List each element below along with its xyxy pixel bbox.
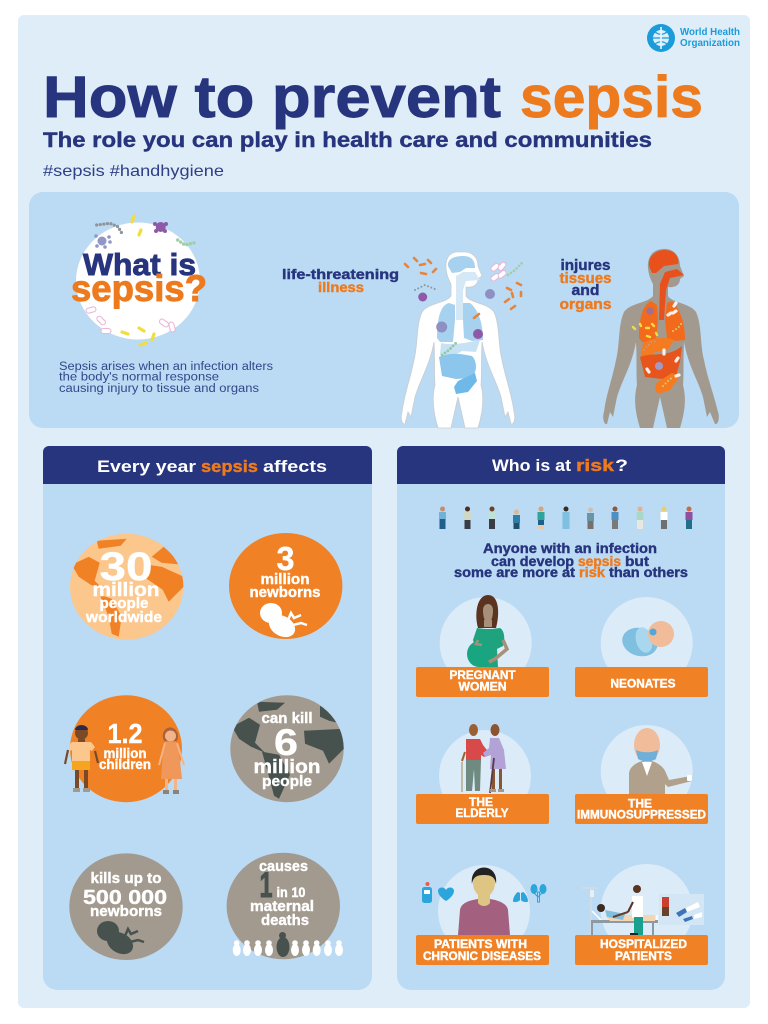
text: sepsis description: Sepsis arises when an infection alters [59, 361, 273, 373]
stat: 3 million newborns: 3 [276, 540, 294, 577]
risk: patients with chronic diseases [416, 865, 549, 965]
label: ELDERLY [456, 808, 509, 820]
label: WOMEN [458, 682, 506, 694]
stat: 3 million newborns: newborns [250, 584, 320, 601]
panel header [43, 446, 372, 484]
stat: causes 1 in 10 maternal deaths: deaths [261, 912, 309, 929]
title: How to prevent [43, 65, 501, 130]
stat: can kill 6 million people [230, 695, 344, 802]
stat: 1.2 million children [65, 695, 184, 802]
stat: causes 1 in 10 maternal deaths: 1 [260, 866, 272, 905]
icon: glucometer [422, 882, 432, 903]
stat: causes 1 in 10 maternal deaths: causes [259, 858, 308, 875]
icon: injured grey body with orange organs [603, 249, 719, 428]
label [416, 667, 549, 697]
stat: 30 million people worldwide: 30 [100, 545, 152, 589]
icon: WHO emblem [647, 24, 675, 52]
icon: row of people [439, 506, 692, 529]
stat: can kill 6 million people: people [262, 773, 312, 790]
label: HOSPITALIZED [600, 939, 687, 951]
panel header: ? [615, 456, 628, 475]
text: anyone with an infection: risk [579, 565, 606, 580]
heading: what is sepsis: sepsis? [71, 268, 207, 309]
microbes on organs [633, 303, 681, 386]
panel: every year sepsis affects [43, 446, 372, 990]
text: anyone with an infection [454, 541, 688, 580]
stat: kills up to 500 000 newborns: newborns [90, 903, 162, 920]
organs: orange [639, 250, 685, 394]
label [416, 935, 549, 965]
stat: kills up to 500 000 newborns: kills up to [90, 870, 162, 887]
stat: causes 1 in 10 maternal deaths: maternal [250, 898, 314, 915]
risk: the elderly [416, 724, 549, 824]
logo text: World Health [680, 26, 740, 38]
label: PREGNANT [450, 670, 516, 682]
label: injures tissues and organs: tissues [560, 271, 612, 287]
label: THE [469, 797, 493, 809]
logo text: Organization [680, 37, 740, 49]
risk: hospitalized patients [575, 864, 708, 965]
icon: patient [458, 868, 510, 935]
subtitle: The role you can play in health care and communities [43, 129, 652, 152]
icon: pregnant woman [467, 595, 507, 667]
microbes around body [405, 258, 522, 355]
label: injures tissues and organs: and [572, 283, 600, 299]
stat: can kill 6 million people: can kill [262, 710, 312, 727]
title: sepsis [520, 65, 703, 130]
panel header: sepsis [201, 457, 258, 476]
icon: hospital bed scene [582, 885, 704, 935]
label: injures tissues and organs [560, 258, 612, 313]
label: life-threatening illness: life-threatening [282, 267, 399, 282]
text: sepsis description: causing injury to tissue and organs [59, 383, 259, 395]
stat: 30 million people worldwide: worldwide [85, 610, 162, 626]
icon: white circle with microbes [76, 216, 200, 345]
icon: heart [438, 887, 454, 901]
hashtags: #sepsis #handhygiene [43, 163, 224, 180]
icon: lungs [513, 887, 528, 902]
label: CHRONIC DISEASES [423, 951, 541, 963]
panel: what is sepsis [29, 192, 739, 428]
label [575, 935, 708, 965]
heading: what is sepsis [71, 247, 207, 309]
text: anyone with an infection: can develop [491, 554, 574, 569]
risk: pregnant women [416, 595, 549, 697]
logo: World Health Organization [647, 24, 740, 52]
text: anyone with an infection: some are more at [454, 565, 576, 580]
icon: dark fetus [97, 921, 144, 959]
text: anyone with an infection: Anyone with an infection [483, 541, 657, 556]
label: IMMUNOSUPPRESSED [577, 810, 706, 822]
icon: row of pregnant women [233, 932, 343, 957]
stat: can kill 6 million people: 6 [274, 722, 298, 763]
label: injures tissues and organs: organs [560, 297, 612, 313]
icon: kidneys [530, 884, 546, 902]
label: PATIENTS [615, 951, 672, 963]
icon: swaddled baby [619, 621, 674, 660]
label [575, 794, 708, 824]
text: anyone with an infection: but [625, 554, 650, 569]
stat: can kill 6 million people: million [254, 757, 320, 778]
panel header [397, 446, 725, 484]
risk: the immunosuppressed [575, 725, 708, 824]
label [416, 794, 549, 824]
panel header: risk [576, 456, 615, 475]
organs: blue [437, 256, 483, 394]
stat: 30 million people worldwide: million [92, 580, 160, 601]
logo text [680, 26, 740, 49]
stat: causes 1 in 10 maternal deaths: in 10 [276, 884, 306, 900]
panel header: Who is at [492, 456, 571, 475]
stat: 3 million newborns [229, 533, 342, 642]
stat: 1.2 million children: million [104, 746, 146, 761]
stat: causes 1 in 10 maternal deaths [227, 853, 343, 959]
panel header: affects [263, 457, 327, 476]
stat: 30 million people worldwide [70, 534, 184, 640]
icon: white fetus [260, 603, 307, 642]
stat: kills up to 500 000 newborns [69, 853, 183, 960]
stat: kills up to 500 000 newborns: 500 000 [83, 887, 167, 909]
label: THE [628, 798, 652, 810]
panel header: Every year [97, 457, 196, 476]
stat: 1.2 million children: children [99, 757, 151, 772]
text: anyone with an infection: than others [609, 565, 688, 580]
label: PATIENTS WITH [434, 939, 527, 951]
icon: boy [65, 725, 98, 792]
icon: elderly couple [462, 724, 506, 793]
icon: masked man [629, 728, 692, 794]
stat: 1.2 million children: 1.2 [108, 718, 142, 749]
text: sepsis description [59, 361, 273, 395]
risk: neonates [575, 597, 708, 697]
icon: girl [159, 728, 184, 794]
label: injures tissues and organs: injures [560, 258, 610, 274]
stat: 3 million newborns: million [260, 571, 310, 588]
heading: what is sepsis: What is [83, 247, 196, 282]
text: sepsis description: the body's normal response [59, 372, 219, 384]
stat: 30 million people worldwide: people [100, 596, 148, 612]
text: anyone with an infection: sepsis [578, 554, 621, 569]
icon: healthy white body with microbes [401, 252, 522, 428]
panel: who is at risk [397, 446, 725, 990]
label: life-threatening illness [282, 267, 399, 295]
label: NEONATES [610, 678, 676, 690]
label: life-threatening illness: illness [318, 280, 364, 295]
